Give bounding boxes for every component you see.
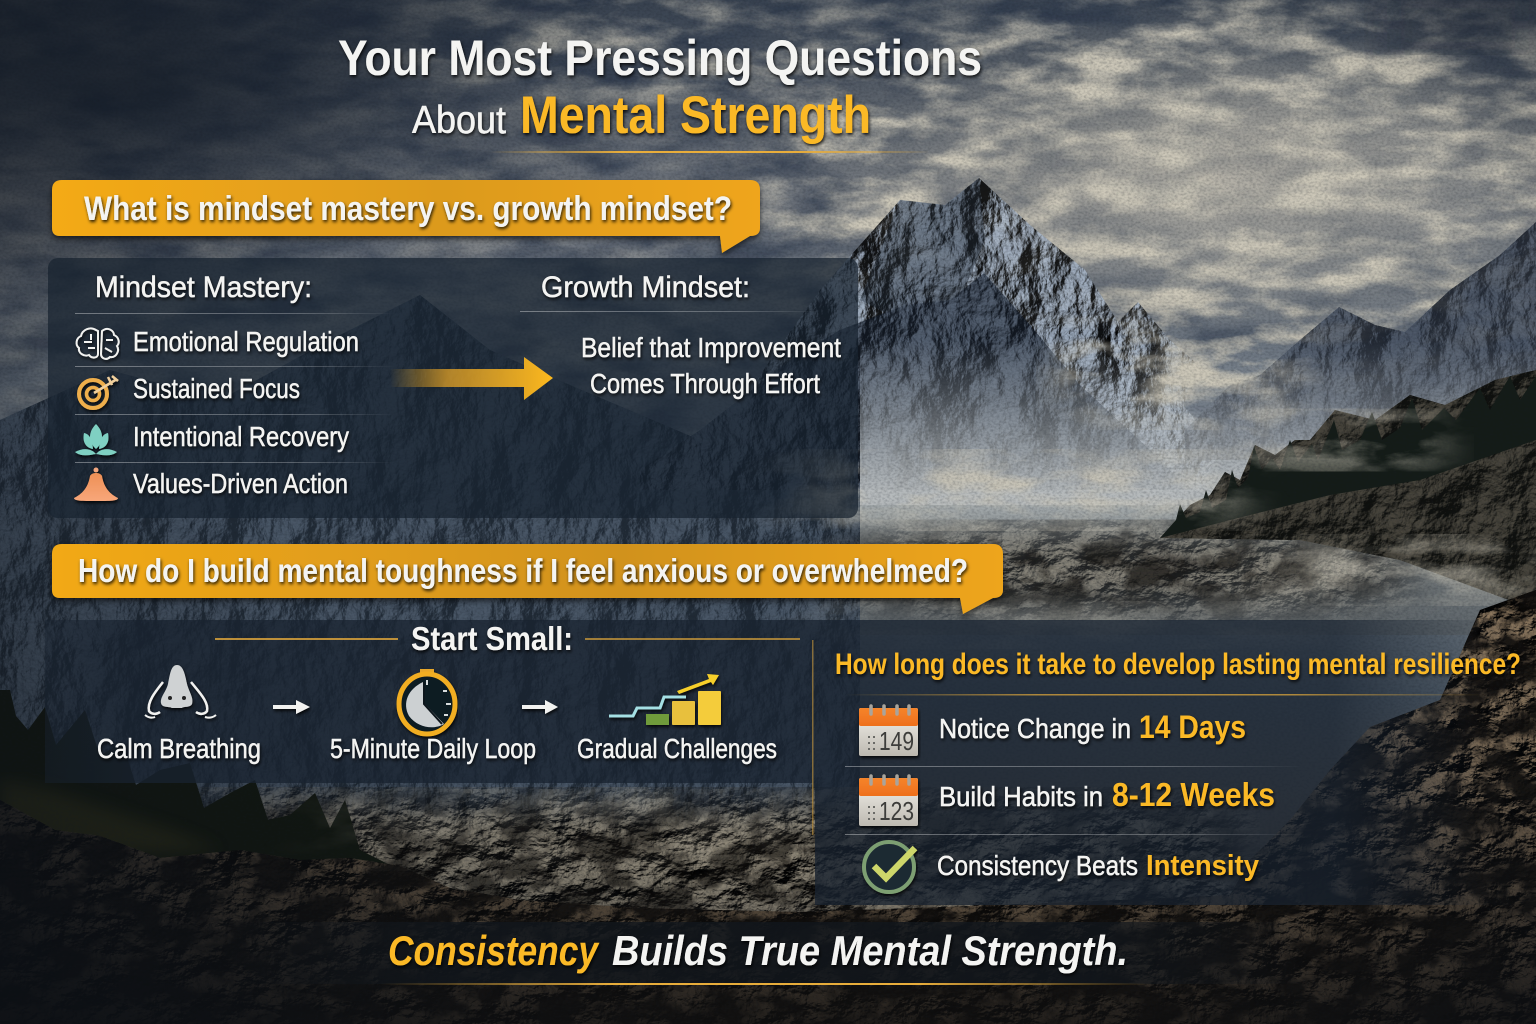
label: calm breathing: Calm Breathing (97, 733, 261, 764)
icon: check mark (864, 842, 915, 892)
text: notice change in 14 days (939, 709, 1246, 745)
label: values-driven action: Values-Driven Action (133, 468, 348, 499)
footer banner: Consistency (388, 927, 600, 974)
text: build habits in 8-12 weeks: 8-12 Weeks (1112, 776, 1275, 813)
arrow: mastery to growth (390, 357, 553, 400)
arrow: loop to challenges (522, 700, 558, 714)
heading: growth mindset: Growth Mindset: (541, 271, 750, 304)
text: consistency beats intensity (937, 850, 1259, 882)
question banner: anxious or overwhelmed (52, 544, 1003, 614)
title: Your Most Pressing Questions (338, 30, 982, 86)
heading: mindset mastery: Mindset Mastery: (95, 271, 312, 304)
panel: mindset mastery vs growth mindset (48, 258, 858, 518)
icon: stopwatch (399, 669, 455, 734)
panel: how long does it take (812, 620, 1536, 905)
icon: brain (77, 328, 119, 359)
question banner: mindset mastery: What is mindset mastery vs. growth mindset? (84, 190, 732, 228)
question banner: anxious or overwhelmed: How do I build mental toughness if I feel anxious or overwhelmed? (78, 552, 968, 589)
heading: start small: Start Small: (411, 620, 573, 657)
label: sustained focus: Sustained Focus (133, 373, 300, 404)
text: build habits in 8-12 weeks (939, 776, 1275, 813)
icon: nose (145, 665, 216, 718)
text: consistency beats intensity: Consistency Beats (937, 850, 1138, 881)
icon: target (79, 376, 118, 408)
text: notice change in 14 days: Notice Change in (939, 713, 1131, 744)
text: build habits in 8-12 weeks: Build Habits in (939, 781, 1103, 812)
title: About (412, 99, 506, 142)
title: Mental Strength (520, 86, 871, 145)
arrow: breathing to loop (273, 700, 310, 714)
label: intentional recovery: Intentional Recovery (133, 421, 349, 452)
text: growth mindset definition (581, 332, 841, 399)
icon: lotus (75, 424, 117, 455)
text: growth mindset definition: Belief that Improvement (581, 332, 841, 363)
icon: gradual challenge steps (609, 674, 721, 725)
label: 5-minute daily loop: 5-Minute Daily Loop (330, 733, 536, 764)
text: notice change in 14 days: 14 Days (1139, 709, 1246, 745)
icon: calendar 123 (859, 776, 918, 826)
label: emotional regulation: Emotional Regulation (133, 326, 359, 357)
icon: calendar 149 (859, 706, 918, 756)
icon: calendar 123: 123 (879, 796, 914, 826)
footer banner (230, 922, 1310, 985)
text: growth mindset definition: Comes Through Effort (590, 368, 820, 399)
icon: calendar 149: 149 (879, 726, 914, 756)
text: consistency beats intensity: Intensity (1146, 850, 1259, 882)
label: gradual challenges: Gradual Challenges (577, 733, 777, 764)
footer banner: Builds True Mental Strength. (612, 927, 1128, 974)
icon: bell (74, 468, 118, 501)
panel: start small (45, 620, 815, 783)
question banner: mindset mastery (52, 180, 760, 253)
title (338, 30, 982, 145)
